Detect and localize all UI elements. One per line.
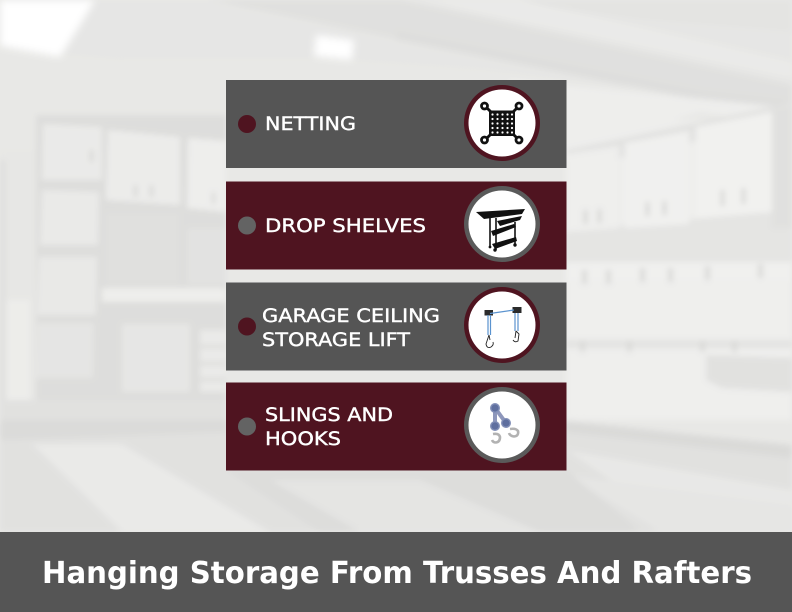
label: garage ceiling storage lift: GARAGE CEILING <box>262 305 440 327</box>
bullet: slings and hooks <box>238 418 256 436</box>
panel: drop shelves <box>226 182 566 270</box>
panel: netting <box>226 80 566 168</box>
bullet: netting <box>238 115 256 133</box>
icon: shelf cart <box>464 186 540 262</box>
label: slings and hooks: SLINGS AND <box>265 404 393 426</box>
label: garage ceiling storage lift: STORAGE LIFT <box>262 329 410 351</box>
title band <box>0 532 792 612</box>
ceiling lights <box>0 0 354 60</box>
panel: slings and hooks <box>226 382 566 470</box>
label: slings and hooks: HOOKS <box>265 428 341 450</box>
icon: net <box>464 85 540 161</box>
label: netting: NETTING <box>265 113 356 135</box>
label: drop shelves: DROP SHELVES <box>265 215 426 237</box>
icon: ceiling lift <box>464 287 540 363</box>
panel: garage ceiling storage lift <box>226 282 566 370</box>
title: Hanging Storage From Trusses And Rafters <box>42 556 752 591</box>
bullet: garage ceiling storage lift <box>238 318 256 336</box>
icon: slings and hooks <box>464 387 540 463</box>
bullet: drop shelves <box>238 216 256 234</box>
